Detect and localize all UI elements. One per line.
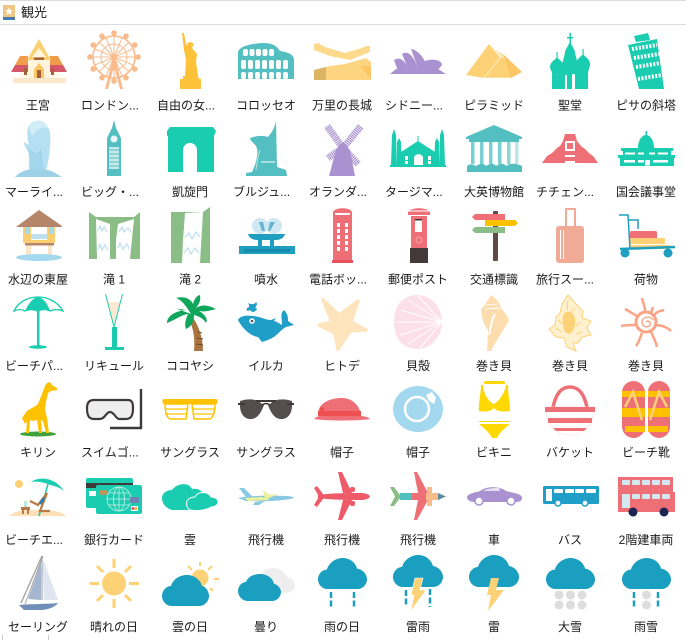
icon: heavy snow (546, 558, 595, 610)
label: オランダ... (309, 184, 367, 199)
icon: aviator sunglasses (238, 399, 294, 419)
label: サングラス (160, 446, 220, 460)
label: 車 (488, 533, 500, 547)
icon: car (467, 487, 522, 505)
icon: thunderstorm (393, 555, 443, 611)
label: 2階建車両 (619, 533, 673, 547)
label: 晴れの日 (90, 620, 138, 634)
label: 雨雪 (634, 620, 658, 634)
icon: capitol building (618, 131, 675, 166)
label: 滝 2 (179, 272, 201, 286)
icon: waterside gazebo (16, 210, 62, 261)
label: スイムゴ... (81, 444, 139, 460)
label: 凱旋門 (172, 185, 208, 199)
icon: spiral shell (621, 298, 671, 347)
label: 郵便ポスト (388, 272, 448, 286)
label: 滝 1 (103, 272, 125, 286)
icon: red hat (314, 398, 370, 420)
icon: striped sunglasses (162, 399, 218, 419)
label: マーライ... (5, 185, 63, 199)
icon: waterfall 2 (171, 207, 210, 263)
label: 雷雨 (406, 620, 430, 634)
label: ビーチパ... (5, 359, 63, 373)
icon: colosseum (238, 43, 294, 79)
label: ピラミッド (464, 98, 524, 112)
label: 万里の長城 (312, 98, 372, 112)
label: 交通標識 (470, 272, 518, 286)
label: ビーチエ... (5, 533, 63, 547)
label: 大雪 (558, 620, 582, 634)
label: 雨の日 (324, 620, 360, 634)
label: セーリング (8, 620, 68, 634)
label: ヒトデ (324, 358, 360, 373)
icon: bikini (479, 381, 510, 438)
icon: sun behind cloud (162, 562, 219, 606)
icon: chichen itza (542, 134, 598, 163)
icon: lightning cloud (469, 555, 519, 611)
label: 国会議事堂 (616, 185, 676, 199)
label: 雲の日 (172, 620, 208, 634)
label: 王宮 (26, 98, 50, 112)
icon: dutch windmill (327, 126, 361, 176)
label: 水辺の東屋 (8, 272, 68, 286)
icon: traffic signpost (472, 211, 518, 261)
label: 電話ボッ... (309, 272, 367, 286)
icon: waterfall 1 (89, 212, 140, 259)
label: サングラス (236, 446, 296, 460)
label: 曇り (254, 620, 278, 634)
icon: bank cards (86, 478, 142, 514)
icon: conch shell (481, 295, 509, 351)
icon: clouds (162, 484, 218, 511)
icon: luggage cart (619, 215, 675, 258)
icon: liqueur glass (105, 294, 124, 350)
icon: sleet cloud (622, 558, 671, 610)
icon: sailboat (19, 556, 58, 610)
label: チチェン... (536, 185, 594, 199)
label: 帽子 (406, 444, 430, 460)
label: 自由の女... (157, 98, 215, 112)
icon: taj mahal (390, 129, 446, 167)
icon: ferris wheel (87, 30, 141, 89)
icon: rain cloud (318, 558, 367, 609)
label: 巻き貝 (628, 359, 664, 373)
icon: arc de triomphe (167, 127, 216, 172)
label: 貝殻 (406, 359, 430, 373)
label: リキュール (84, 359, 144, 373)
heading: 観光 (21, 5, 47, 20)
icon: double-decker bus (618, 477, 675, 516)
icon: sun (90, 559, 139, 608)
label: 大英博物館 (464, 184, 524, 199)
label: ロンドン... (81, 98, 139, 112)
label: キリン (20, 446, 56, 460)
label: バケット (546, 446, 594, 460)
icon: pyramids (466, 44, 522, 78)
label: 巻き貝 (476, 359, 512, 373)
label: ビキニ (476, 446, 512, 460)
icon: striped bucket bag (545, 387, 595, 435)
label: イルカ (248, 359, 284, 373)
icon: fountain (239, 218, 295, 254)
label: 旅行スー... (536, 272, 594, 286)
icon: post box (408, 208, 430, 263)
label: 雷 (488, 620, 500, 634)
icon: coconut palm (167, 295, 216, 351)
label: シドニー... (385, 98, 443, 112)
label: 雲 (184, 533, 196, 547)
icon: multicoloured airplane (390, 472, 446, 520)
icon: beach scene (10, 479, 66, 516)
icon: bus (543, 486, 599, 506)
icon: blue sun hat (393, 386, 443, 432)
icon: british museum (466, 125, 522, 172)
icon: flip flops (622, 381, 670, 438)
icon: telephone box (332, 208, 353, 263)
label: 飛行機 (400, 533, 436, 547)
icon: palace (11, 39, 67, 83)
icon: dolphin (238, 302, 294, 342)
icon: big ben (107, 120, 121, 176)
icon: pale airliner (238, 488, 294, 505)
icon: beach parasol (14, 297, 63, 349)
label: バス (558, 533, 582, 547)
panel header icon (3, 5, 15, 20)
label: ココヤシ (166, 359, 214, 373)
label: 帽子 (330, 444, 354, 460)
label: 荷物 (634, 272, 658, 286)
label: ビッグ・... (81, 185, 139, 199)
label: 巻き貝 (552, 359, 588, 373)
icon: statue of liberty (180, 33, 201, 89)
icon: overcast clouds (238, 568, 295, 601)
label: 聖堂 (558, 98, 582, 112)
label: 飛行機 (248, 533, 284, 547)
icon: suitcase (556, 209, 584, 263)
icon: burj al arab (246, 120, 287, 176)
label: 銀行カード (84, 533, 144, 547)
label: コロッセオ (236, 98, 296, 112)
icon: sydney opera house (390, 49, 446, 74)
icon: giraffe (20, 382, 57, 436)
label: ビーチ靴 (622, 446, 670, 460)
icon: red airplane (314, 472, 370, 520)
label: ブルジュ... (233, 184, 290, 199)
label: 噴水 (254, 272, 278, 286)
icon: great wall (314, 43, 371, 80)
icon: spiky conch shell (549, 295, 591, 351)
icon: cathedral (550, 33, 590, 89)
label: ピサの斜塔 (616, 98, 676, 112)
icon: swim goggles (87, 389, 141, 428)
icon: merlion (15, 121, 62, 177)
icon: leaning tower of pisa (628, 33, 664, 89)
label: タージマ... (385, 185, 443, 199)
label: 飛行機 (324, 533, 360, 547)
icon: starfish (319, 300, 366, 349)
icon: scallop shell (394, 295, 442, 349)
